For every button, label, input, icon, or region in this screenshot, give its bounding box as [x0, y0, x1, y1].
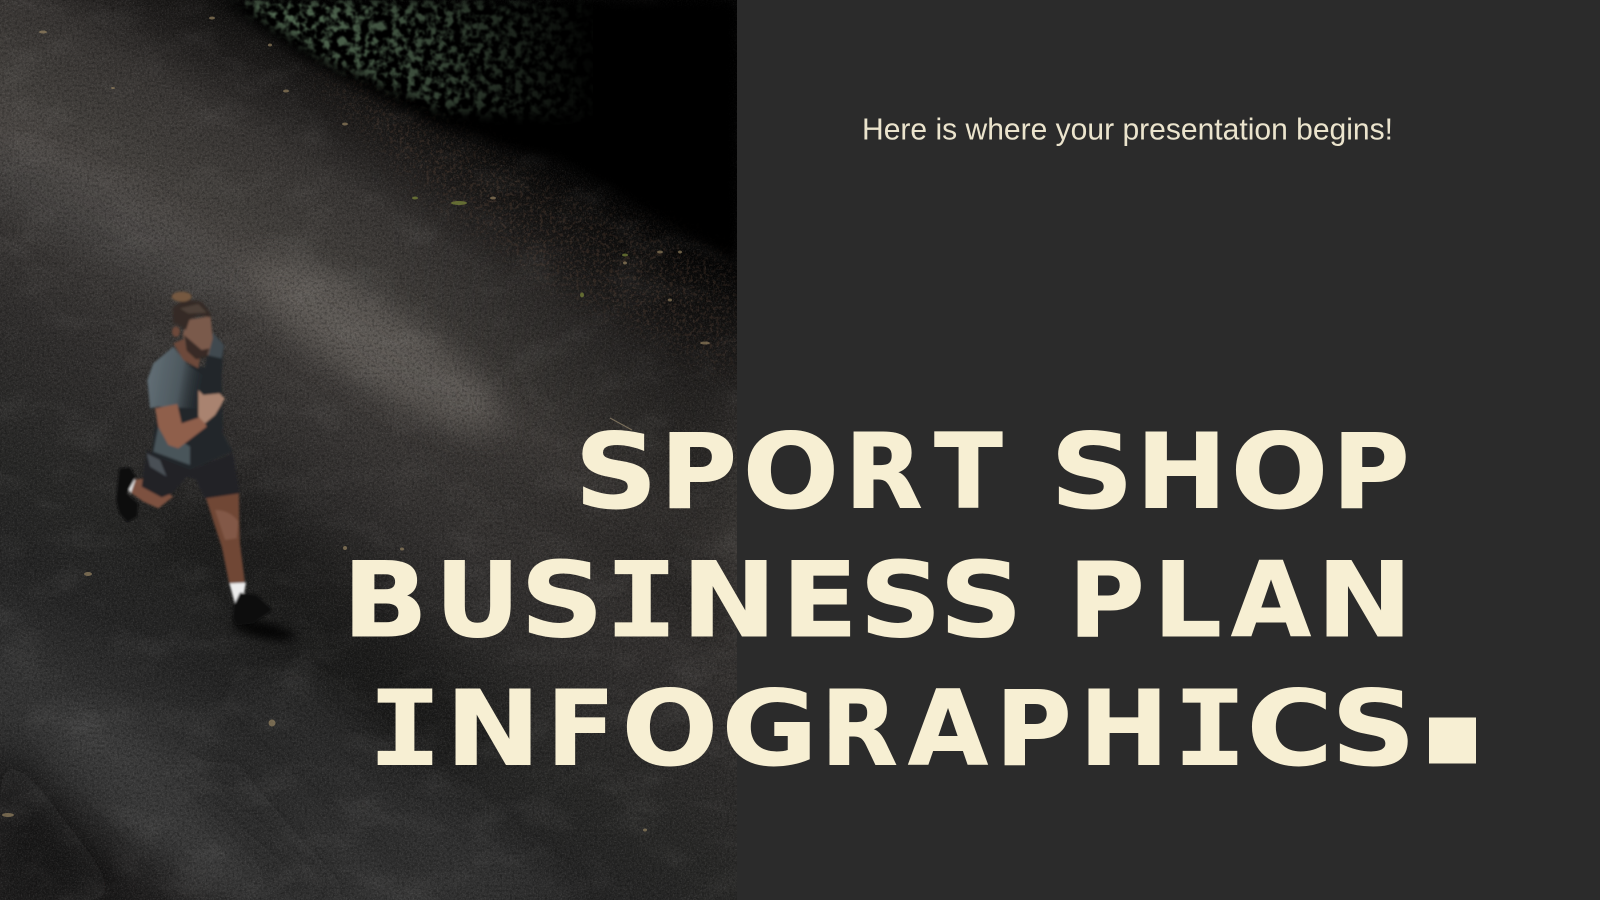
title line 1: O [743, 413, 839, 533]
rear sock [126, 477, 135, 493]
fallen leaves [2, 16, 710, 832]
title line 2: P [1068, 541, 1145, 661]
shirt [147, 332, 233, 470]
green leaves [412, 196, 628, 298]
title line 3: F [547, 669, 615, 789]
title line 3: I [1173, 669, 1247, 789]
icon: square full stop [1429, 718, 1476, 764]
asphalt grain [0, 0, 737, 900]
title line 3: N [446, 669, 540, 789]
title line 2: S [520, 541, 604, 661]
title line 2: N [1316, 541, 1412, 661]
title [343, 413, 1416, 789]
dark lower-left corner [0, 751, 108, 884]
asphalt dark grain [0, 0, 737, 900]
title line 2: N [682, 541, 776, 661]
title line 3: I [368, 669, 442, 789]
road base tone [0, 0, 737, 900]
front leg [205, 493, 245, 584]
title line 3: C [1247, 669, 1333, 789]
front shoe [233, 593, 273, 625]
title line 1: H [1136, 413, 1227, 533]
lower road tracks [74, 684, 532, 892]
title line 1: T [934, 413, 1003, 533]
subtitle: Here is where your presentation begins! [862, 112, 1393, 146]
road right side shading [478, 263, 737, 642]
title line 1: R [845, 413, 922, 533]
rear leg [129, 478, 173, 508]
title line 2: S [860, 541, 942, 661]
title line 1: O [1231, 413, 1328, 533]
rear shoe [116, 467, 138, 522]
title line 2: E [782, 541, 858, 661]
dark hedge above road [222, 0, 737, 265]
asphalt mottling [0, 0, 737, 900]
title line 2: A [1231, 541, 1311, 661]
title line 2: L [1153, 541, 1222, 661]
leaf litter [326, 80, 737, 372]
arm [155, 404, 207, 448]
shorts [142, 450, 239, 498]
title line 3: A [908, 669, 988, 789]
runner [116, 292, 296, 644]
title line 2: I [605, 541, 678, 661]
title line 2: S [939, 541, 1023, 661]
title line 2: U [435, 541, 520, 661]
worn light patch on road [249, 255, 504, 438]
title line 2: B [343, 541, 428, 661]
panel: photo of runner on road [0, 0, 737, 900]
front sock [229, 583, 246, 605]
hand [198, 390, 225, 423]
title line 1: P [1332, 413, 1410, 533]
title line 3: P [996, 669, 1072, 789]
title line 3: O [622, 669, 718, 789]
title line 3: R [821, 669, 898, 789]
hair bun [172, 292, 192, 302]
panel: dark right background [737, 0, 1600, 900]
face and beard [183, 316, 213, 358]
runner cast shadow band [166, 488, 478, 750]
title line 3: S [1331, 669, 1416, 789]
title line 1: S [575, 413, 658, 533]
title line 1: P [660, 413, 737, 533]
hair [173, 299, 211, 330]
twig on road [610, 418, 632, 430]
title line 3: H [1079, 669, 1169, 789]
runner foot shadow [232, 619, 294, 644]
neck [173, 338, 200, 368]
title line 1: S [1050, 413, 1134, 533]
title line 3: G [722, 669, 818, 789]
foliage [244, 0, 582, 119]
